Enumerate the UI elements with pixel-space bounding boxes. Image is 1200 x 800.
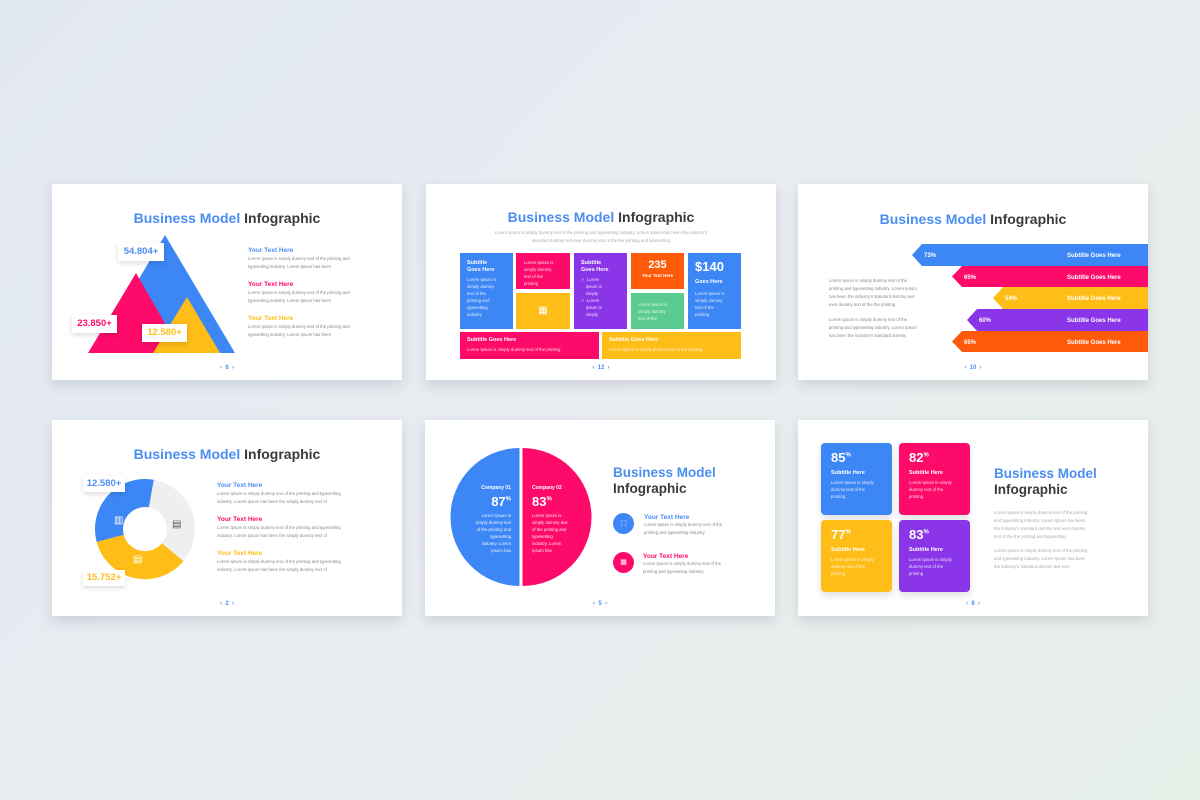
chart: triangles [88,235,235,353]
text block 1: industry. Lorem Ipsum has been the simply dummy text of [217,499,327,504]
text block 1: Your Text Here [644,514,689,521]
icon circle blue [613,513,634,534]
text block 1: printing and typesetting industry. [644,530,706,535]
slide 3: arrow bars [798,184,1148,380]
card yellow 77%: printing [831,570,845,576]
company 02: Lorem Ipsum is [532,513,561,518]
box green: text of the [638,316,657,321]
text block 1: Lorem Ipsum is simply dummy text of the [644,522,722,527]
slide 1: triangle infographic [52,184,402,380]
company 02: typesetting [532,534,553,539]
box blue: typesetting [467,305,488,310]
page number: ‹ 12 › [592,365,610,371]
left text 2 [829,317,917,338]
card purple 83%: 83% [909,527,929,542]
label 23.850+ [72,315,117,333]
donut chart: ▤ [172,519,181,530]
company 01: Company 01 [481,485,511,491]
card pink 82%: Lorem Ipsum is simply [909,480,952,484]
box pink wide: Subtitle Goes Here [467,337,516,343]
box blue: text of the [467,291,486,296]
company 02: Company 02 [532,485,562,491]
text block 1: Your Text Here [248,247,293,254]
label 12.580+: 12.580+ [87,478,121,489]
bar chart arrows: 54% [1005,296,1018,302]
paragraph 2 [994,548,1088,569]
box orange 235: 235 [648,259,667,271]
icon circle blue: ⬚ [620,520,627,527]
label 23.850+: 23.850+ [77,318,112,329]
company 01: Ipsum has [491,548,511,553]
text block 2 [643,553,721,574]
box purple: Goes Here [581,266,609,272]
label 15.752+: 15.752+ [87,572,121,583]
text block 1: Your Text Here [217,482,262,489]
bar chart arrows: 73% [924,253,937,259]
bar chart arrows: Subtitle Goes Here [1067,275,1121,281]
text block 2: Your Text Here [248,281,293,288]
card purple 83%: Subtitle Here [909,547,943,553]
box blue $140: simply dummy [695,298,722,302]
box blue: printing and [467,298,489,303]
text block 2: Lorem Ipsum is simply dummy text of the [643,561,721,566]
card pink 82% [899,443,970,515]
box pink small: Lorem Ipsum is [524,260,553,265]
card blue 85% [821,443,892,515]
left text: ever dummy text of the the printing [829,302,895,307]
title: Business Model [613,465,716,480]
title: Infographic [994,482,1068,496]
donut chart [95,479,195,580]
left text 2: has been the industry's standard dummy [829,333,906,338]
left text: Lorem Ipsum is simply dummy text of the [829,278,907,283]
box purple: Ipsum is [586,305,602,310]
card blue 85%: printing [831,494,845,498]
card blue 85%: dummy text of the [831,486,865,492]
bar chart arrows: Subtitle Goes Here [1067,318,1121,324]
label 54.804+ [118,243,164,261]
split circle chart [450,448,592,586]
title: Business Model Infographic [134,210,320,226]
card yellow 77%: Subtitle Here [831,547,865,553]
box yellow wide [602,332,741,359]
text block 3: industry. Lorem Ipsum has been the simply dummy text of [217,567,327,572]
title: Infographic [613,480,686,496]
company 01: 87% [491,494,511,509]
card pink 82%: 82% [909,450,929,465]
card yellow 77%: dummy text of the [831,564,865,568]
left text: has been the industry's standard dummy text [829,294,914,299]
company 01: typesetting [490,534,511,539]
box yellow icon: ▦ [538,305,548,316]
subtitle text [495,230,707,243]
left text 2: Lorem Ipsum is simply dummy text of the [829,317,907,322]
box purple: Ipsum is [586,284,602,289]
bar chart arrows: Subtitle Goes Here [1067,340,1121,346]
box purple: Subtitle [581,260,601,266]
box blue [460,253,513,329]
text block 1: Lorem Ipsum is simply dummy text of the printing and typesetting [217,491,341,496]
box pink small: printing [524,281,538,286]
text block 3 [248,315,350,337]
card pink 82%: Subtitle Here [909,470,943,476]
company 01: of the printing and [477,527,511,532]
slide 4: donut cycle [52,420,402,616]
paragraph 1: text of the the printing and typesetting [994,534,1066,539]
title: Business Model Infographic [880,211,1066,227]
text block 1: Lorem Ipsum is simply dummy text of the printing and [248,256,350,261]
company 02: Ipsum has [532,548,552,553]
box blue $140: Lorem Ipsum is [695,290,724,296]
page number: ‹ 6 › [220,365,234,371]
card yellow 77% [821,520,892,592]
box blue: Subtitle [467,260,487,266]
text block 1: typesetting industry. Lorem Ipsum has been [248,264,331,269]
text block 2: printing and typesetting industry. [643,569,705,574]
text block 3: Your Text Here [248,315,293,322]
box pink wide [460,332,599,359]
left text [829,278,917,307]
text block 1 [217,482,341,504]
box purple: simply [586,312,598,317]
box yellow wide: Lorem Ipsum is simply dummy text of the printing [609,346,702,352]
card purple 83%: Lorem Ipsum is simply [909,556,952,562]
page number: ‹ 5 › [593,601,607,607]
card purple 83%: dummy text of the [909,564,943,568]
label 12.580+ [142,324,187,342]
title: Business Model Infographic [508,209,694,225]
box pink wide: Lorem Ipsum is simply dummy text of the printing [467,346,560,352]
text block 2 [248,281,350,303]
box blue $140: text of the [695,304,714,310]
label 12.580+: 12.580+ [147,327,182,338]
paragraph 1 [994,510,1088,539]
paragraph 2: the industry's standard dummy text ever [994,564,1070,569]
donut chart: ▤ [133,554,142,565]
text block 2: Lorem Ipsum is simply dummy text of the printing and typesetting [217,525,341,530]
card blue 85%: Lorem Ipsum is simply [831,480,874,484]
bar chart arrows: Subtitle Goes Here [1067,296,1121,302]
company 01 [475,485,511,553]
box blue: Lorem Ipsum is [467,277,496,282]
text block 3: Lorem Ipsum is simply dummy text of the printing and [248,324,350,329]
text block 1 [248,247,350,269]
box yellow wide: Subtitle Goes Here [609,337,658,343]
company 01: simply dummy text [475,520,511,525]
card pink 82%: printing [909,494,923,498]
box blue: industry [467,312,482,317]
company 02: industry. Lorem [532,541,561,546]
text block 2: Your Text Here [217,516,262,523]
card pink 82%: dummy text of the [909,486,943,492]
text block 3: Lorem Ipsum is simply dummy text of the printing and typesetting [217,559,341,564]
box green [631,293,684,329]
box purple: simply [586,291,598,296]
box blue $140: $140 [695,259,724,274]
box blue: simply dummy [467,284,494,289]
slide 5: split circle [425,420,775,616]
text block 3 [217,550,341,572]
title [994,466,1097,497]
bar chart arrows [912,244,1148,352]
text block 2: industry. Lorem Ipsum has been the simply dummy text of [217,533,327,538]
icon circle pink: ▦ [620,559,627,566]
box purple [574,253,627,329]
slide 6: percentage cards [798,420,1148,616]
bar chart arrows: 60% [979,318,992,324]
box orange 235 [631,253,684,289]
slide 2: grid boxes [426,184,776,380]
box purple: ✓ Lorem [581,298,599,303]
paragraph 1: Lorem Ipsum is simply dummy text of the printing [994,510,1087,515]
label 15.752+ [83,570,125,586]
paragraph 1: the industry's standard dummy text ever dummy [994,526,1085,531]
box green: simply dummy [638,309,665,314]
page number: ‹ 8 › [966,601,980,607]
company 02: simply dummy text [532,520,568,525]
text block 3: typesetting industry. Lorem Ipsum has been [248,332,331,337]
card yellow 77%: Lorem Ipsum is simply [831,556,874,562]
box blue: Goes Here [467,266,495,272]
company 02 [532,485,568,553]
text block 3: Your Text Here [217,550,262,557]
box pink small: text of the [524,274,543,279]
company 01: Lorem Ipsum is [482,513,511,518]
bar chart arrows: 65% [964,340,977,346]
paragraph 1: and typesetting industry. Lorem Ipsum has been [994,518,1085,523]
title: Business Model Infographic [134,446,320,462]
paragraph 2: and typesetting industry. Lorem Ipsum has been [994,556,1085,561]
box orange 235: Your Text Here [642,273,673,278]
left text 2: printing and typesetting industry. Lorem Ipsum [829,325,917,330]
donut chart: ▥ [114,515,123,526]
text block 2: Lorem Ipsum is simply dummy text of the printing and [248,290,350,295]
paragraph 2: Lorem Ipsum is simply dummy text of the printing [994,548,1087,553]
text block 2: typesetting industry. Lorem Ipsum has been [248,298,331,303]
box blue $140 [688,253,741,329]
bar chart arrows: 65% [964,275,977,281]
left text: printing and typesetting industry. Lorem Ipsum [829,286,917,291]
bar chart arrows: Subtitle Goes Here [1067,253,1121,259]
box pink small: simply dummy [524,267,551,272]
label 54.804+: 54.804+ [124,246,158,257]
title: Business Model [994,466,1097,481]
page number: ‹ 10 › [964,365,982,371]
subtitle text: Lorem Ipsum is simply dummy text of the printing and typesetting industry. Lorem Ipsum has been the industry's [495,230,707,235]
subtitle text: standard dummy text ever dummy text of the the printing and typesetting [532,238,670,243]
box blue $140: printing [695,312,709,316]
box yellow icon [516,293,570,329]
card purple 83% [899,520,970,592]
title [613,465,716,496]
page number: ‹ 2 › [220,601,234,607]
text block 2 [217,516,341,538]
company 02: 83% [532,494,552,509]
card purple 83%: printing [909,570,923,576]
card yellow 77%: 77% [831,527,851,542]
company 01: industry. Lorem [482,541,511,546]
box blue $140: Goes Here [695,279,723,285]
card blue 85%: 85% [831,450,851,465]
text block 1 [644,514,722,535]
box pink small [516,253,570,289]
box green: Lorem Ipsum is [638,302,667,307]
text block 2: Your Text Here [643,553,688,560]
label 12.580+ [83,476,125,492]
card blue 85%: Subtitle Here [831,470,865,476]
company 02: of the printing and [532,527,566,532]
icon circle pink [613,552,634,573]
box purple: ✓ Lorem [581,277,599,282]
